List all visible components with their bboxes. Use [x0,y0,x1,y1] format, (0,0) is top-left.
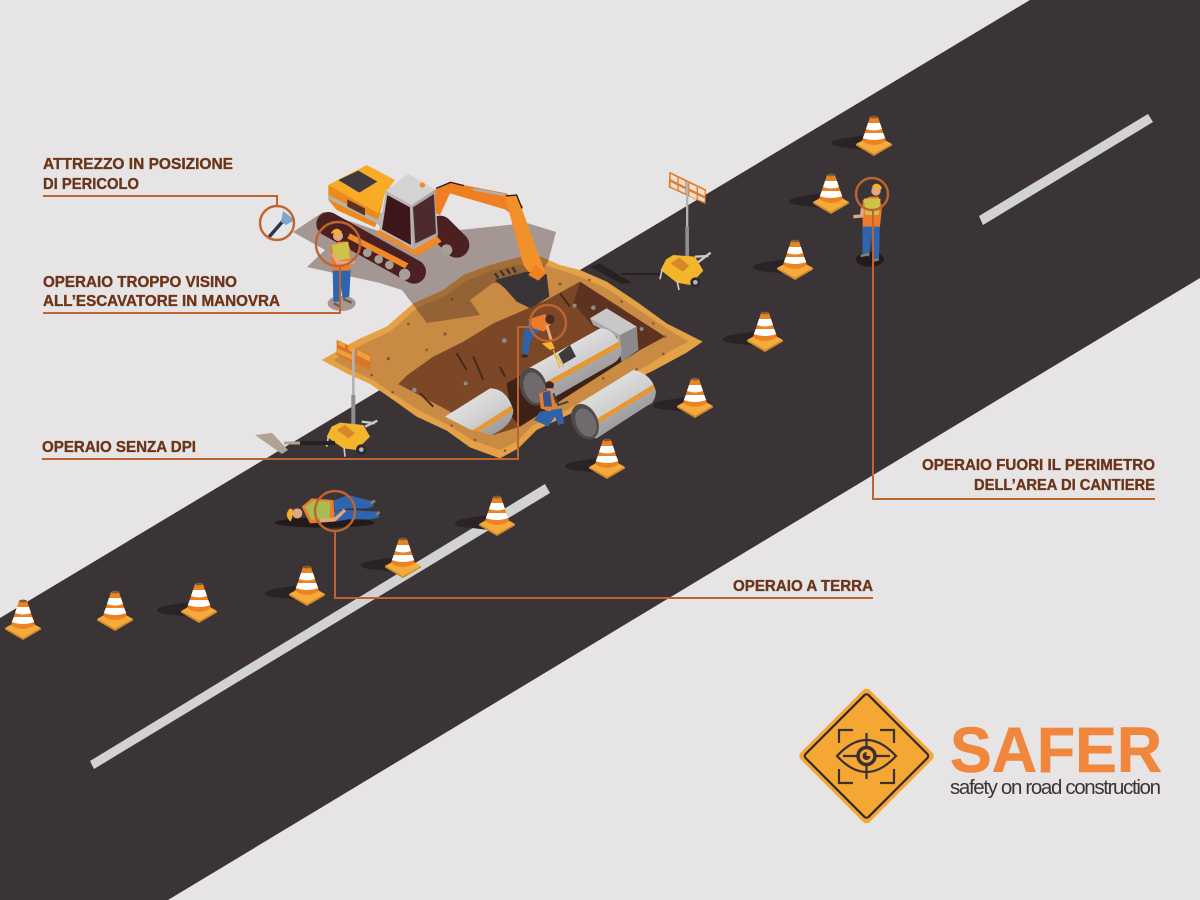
highlight ring [315,491,355,531]
head [871,186,881,196]
trailer body [327,423,370,450]
cone 6 [455,496,515,536]
heading: ALL’ESCAVATORE IN MANOVRA [43,293,280,310]
boots [371,501,379,515]
boom ridge [436,182,464,188]
trench far wall [573,282,665,350]
ground shadow [275,518,375,528]
trench wall [398,282,665,435]
wordmark: SAFER [950,714,1162,786]
cab front [412,189,438,248]
cone 2 [97,591,133,631]
logo: SAFER [797,687,1162,825]
callout: worker outside perimeter [856,178,1155,499]
cab roof [386,174,435,205]
ground shadow [328,296,356,311]
road dashed line: lower [90,484,550,769]
trench wall cracks [420,293,570,407]
grille [347,199,365,216]
hard hat [287,508,293,522]
trailer body [661,255,703,285]
highlight ring [316,222,360,266]
heading: OPERAIO A TERRA [733,578,873,595]
heading: DI PERICOLO [43,176,139,193]
near track [328,224,414,280]
pipe B [515,328,622,409]
torso [330,242,351,271]
undercarriage [370,210,438,253]
wheel [356,444,367,455]
safety vest [305,501,330,520]
heading: ATTREZZO IN POSIZIONE [43,156,233,173]
safety vest [864,199,881,215]
boom [435,182,523,218]
head [292,508,302,518]
fallen worker [275,495,379,528]
pipe C [566,370,656,444]
lamp panel [669,172,706,204]
engine housing side [328,185,385,227]
heading: OPERAIO FUORI IL PERIMETRO [922,457,1155,474]
leader line [873,210,1155,499]
cab base [375,230,442,256]
highlight ring [530,305,566,341]
trench rocks [412,304,644,392]
far track [440,228,457,256]
engine vent [338,171,377,193]
cone 5 [361,538,421,578]
sand pebbles [370,279,666,452]
leader line [335,531,873,598]
leader line [43,267,340,313]
wheel [690,277,700,287]
cone 9 [723,312,783,352]
light tower right shadow [590,263,663,284]
cab side [379,190,413,248]
light tower right [660,172,711,290]
tagline: safety on road construction [950,776,1161,799]
highlight ring [260,206,294,240]
torso [863,197,882,227]
arm [320,510,345,521]
excavator shadow [293,212,556,323]
cone 10 [753,240,813,280]
worker with jackhammer [521,314,563,368]
icon: jackhammer [269,211,295,237]
legs [333,495,374,512]
safety vest [332,242,350,262]
beacon [420,182,425,188]
sand mound [322,253,703,458]
light tower left [327,340,377,457]
cone 3 [157,583,217,623]
cone 1 [5,600,41,640]
mast [352,350,355,432]
road dashed line: upper [979,114,1153,225]
icon: warning diamond with eye [797,687,936,825]
cone 11 [789,174,849,214]
arm [505,195,545,281]
cone 8 [653,378,713,418]
bucket teeth [495,267,516,278]
leader line [42,327,531,459]
arms [333,253,355,263]
trousers [333,269,351,302]
boots [861,254,879,261]
hydraulic cylinder [473,189,505,195]
pipe C open end [566,399,604,444]
heading: OPERAIO SENZA DPI [42,439,196,456]
concrete junction box [590,308,638,362]
cone 4 [265,566,325,606]
excavator [328,165,549,308]
highlight ring [856,178,888,210]
light tower shadow left [255,433,335,454]
cone 12 [832,116,892,156]
mast [686,182,688,263]
engine housing top [328,165,395,213]
arm ridge [506,195,522,208]
arms [853,207,863,217]
excavation site [322,253,703,458]
worker too close to excavator [328,229,356,311]
maintenance hatch [558,345,576,364]
callout: worker on the ground [315,491,873,598]
trailer frame [362,421,377,427]
head [333,231,343,241]
bucket [495,272,549,308]
leader line [43,196,277,207]
trench floor [507,340,640,427]
sand inner surface [333,262,688,450]
hard hat [331,229,342,233]
trousers [862,225,880,261]
stabilisers [327,437,345,457]
boots [334,299,352,307]
callout: worker without PPE [42,305,566,459]
torso [302,498,335,523]
ground shadow [856,252,884,267]
trailer frame [695,253,711,263]
stabilisers [660,270,679,290]
heading: DELL’AREA DI CANTIERE [974,477,1155,494]
worker outside site perimeter [853,184,884,267]
lamp panel [337,340,371,371]
kneeling worker [534,381,568,427]
side stripe [328,195,378,224]
bucket linkage [528,265,546,281]
heading: OPERAIO TROPPO VISINO [43,274,237,291]
cone 7 [565,439,625,479]
pipe A [445,388,513,435]
hard hat [872,184,882,190]
pipe B open end [515,364,552,409]
callout: worker too close [43,222,360,313]
callout: tool in dangerous position [43,156,295,240]
